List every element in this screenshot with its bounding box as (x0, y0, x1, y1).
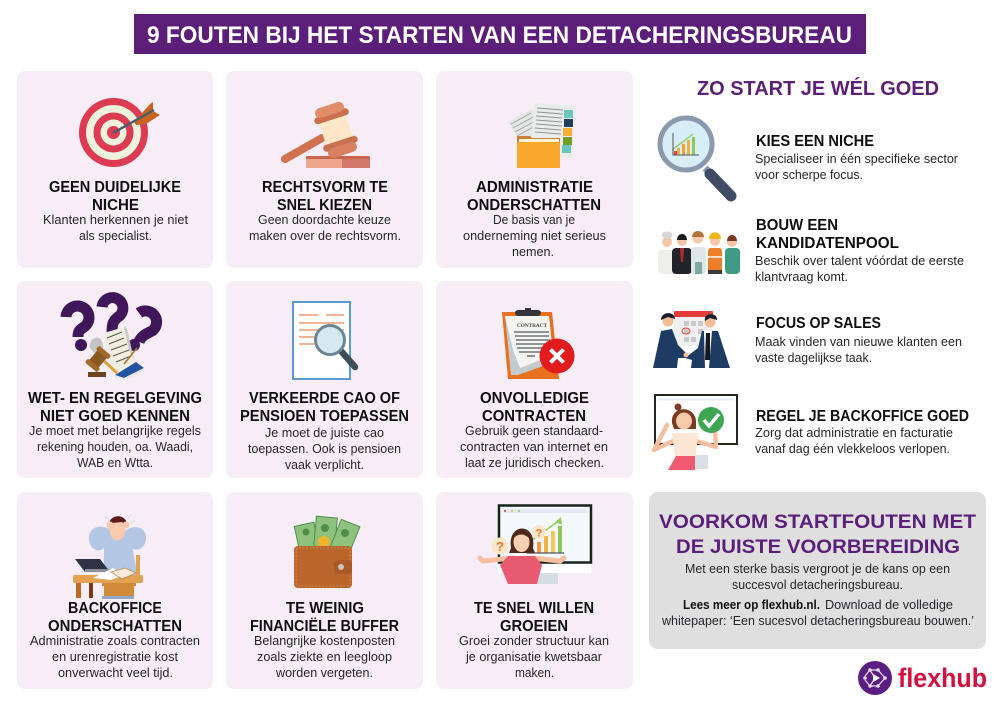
text: FOCUS OP SALES (756, 315, 881, 332)
icon: woman in front of growth chart: ? (496, 539, 504, 554)
tip: regel je backoffice goed (654, 395, 969, 470)
panel: verkeerde cao of pensioen (226, 281, 423, 478)
description: worden vergeten. (275, 666, 373, 680)
description: Gebruik geen standaard- (465, 424, 603, 438)
panel text (685, 562, 950, 592)
panel heading: DE JUISTE VOORBEREIDING (676, 536, 960, 558)
heading (474, 600, 594, 635)
description: laat ze juridisch checken. (465, 456, 604, 470)
heading: NICHE (92, 197, 139, 214)
heading (240, 390, 409, 425)
description (30, 634, 200, 680)
description: toepassen. Ook is pensioen (248, 442, 401, 456)
panel text: Met een sterke basis vergroot je de kans op een (685, 562, 950, 576)
heading: NIET GOED KENNEN (40, 408, 190, 425)
panel: rechtsvorm te snel kiezen (226, 71, 423, 268)
icon: woman in front of growth chart (480, 506, 591, 584)
icon: contract clipboard with red cross (502, 308, 574, 379)
description: rekening houden, oa. Waadi, (37, 440, 193, 454)
panel heading: VOORKOM STARTFOUTEN MET (659, 511, 976, 533)
heading (480, 390, 589, 425)
description (463, 213, 606, 259)
description: als specialist. (79, 229, 152, 243)
text: KANDIDATENPOOL (756, 235, 899, 252)
text: vanaf dag één vlekkeloos verlopen. (755, 442, 950, 456)
description: Groei zonder structuur kan (459, 634, 609, 648)
heading: TE WEINIG (286, 600, 364, 617)
heading: ONVOLLEDIGE (480, 390, 589, 407)
icon: magnifier over chart (660, 118, 731, 196)
heading (262, 179, 388, 214)
panel heading (659, 511, 976, 558)
icon: gavel (285, 100, 370, 168)
icon: wallet with banknotes (294, 516, 360, 588)
heading: FINANCIËLE BUFFER (250, 618, 399, 635)
icon: contract clipboard with red cross: CONTRACT (517, 323, 548, 329)
icon: documents and folder (508, 103, 576, 168)
logo: flexhub: flexhub (898, 663, 987, 693)
panel: administratie onderschatten (436, 71, 633, 268)
description: Administratie zoals contracten (30, 634, 200, 648)
text: BOUW EEN (756, 217, 838, 234)
call to action (661, 598, 974, 628)
heading (250, 600, 399, 635)
logo: flexhub (858, 661, 987, 695)
tip: focus op sales (653, 311, 962, 368)
description (254, 634, 395, 680)
icon: group of professionals (658, 231, 740, 274)
call to action: whitepaper: ‘Een sucesvol detacheringsbureau bouwen.’ (661, 614, 974, 628)
description (29, 424, 201, 470)
description: Klanten herkennen je niet (43, 213, 189, 227)
heading: SNEL KIEZEN (277, 197, 372, 214)
description (249, 213, 401, 243)
description: contracten van internet en (460, 440, 608, 454)
panel: geen duidelijke niche (17, 71, 213, 268)
icon: woman pointing at green check on monitor (654, 395, 737, 470)
heading: TE SNEL WILLEN (474, 600, 594, 617)
tip: bouw een kandidatenpool (658, 217, 964, 284)
icon: woman in front of growth chart: ? (536, 528, 543, 540)
description: maken over de rechtsvorm. (249, 229, 401, 243)
heading (49, 179, 181, 214)
description: maken. (515, 666, 554, 680)
heading: WET- EN REGELGEVING (28, 390, 202, 407)
description: en urenregistratie kost (52, 650, 179, 664)
text: Maak vinden van nieuwe klanten een (755, 335, 962, 349)
description: onverwacht veel tijd. (58, 666, 173, 680)
call to action: Lees meer op flexhub.nl. (683, 598, 820, 612)
description (248, 426, 401, 472)
text: klantvraag komt. (755, 270, 848, 284)
description: nemen. (512, 245, 554, 259)
description (43, 213, 189, 243)
heading: GROEIEN (500, 618, 568, 635)
tip: kies een niche (660, 118, 958, 196)
heading: CONTRACTEN (482, 408, 586, 425)
text: vaste dagelijkse taak. (755, 351, 872, 365)
text (755, 408, 969, 456)
text (755, 315, 962, 365)
panel: wet- en regelgeving (17, 281, 213, 478)
panel: backoffice onderschatten (17, 492, 213, 689)
description: WAB en Wtta. (77, 456, 153, 470)
text: Specialiseer in één specifieke sector (755, 152, 958, 166)
text: REGEL JE BACKOFFICE GOED (756, 408, 969, 425)
description: vaak verplicht. (285, 458, 364, 472)
description: De basis van je (493, 213, 575, 227)
heading: ADMINISTRATIE (476, 179, 593, 196)
heading: ONDERSCHATTEN (48, 618, 182, 635)
icon: handshake in front of calendar (653, 311, 730, 368)
heading: PENSIOEN TOEPASSEN (240, 408, 409, 425)
text (755, 217, 964, 284)
heading: zo start je wel goed: ZO START JE WÉL GOED (697, 77, 939, 100)
icon: target with arrow (79, 98, 160, 167)
heading: GEEN DUIDELIJKE (49, 179, 181, 196)
icon: document with magnifier (293, 302, 355, 379)
description: je organisatie kwetsbaar (465, 650, 602, 664)
panel: te snel willen groeien (436, 492, 633, 689)
description: onderneming niet serieus (463, 229, 606, 243)
description: zoals ziekte en leegloop (257, 650, 392, 664)
text: Zorg dat administratie en facturatie (755, 426, 953, 440)
call to action: Download de volledige (825, 598, 953, 612)
description: Geen doordachte keuze (258, 213, 391, 227)
title banner (134, 14, 866, 54)
panel: onvolledige contracten (436, 281, 633, 478)
heading: RECHTSVORM TE (262, 179, 388, 196)
description: Je moet de juiste cao (265, 426, 384, 440)
text (755, 133, 958, 182)
heading: VERKEERDE CAO OF (249, 390, 400, 407)
text: KIES EEN NICHE (756, 133, 874, 150)
panel: te weinig financiele buffer (226, 492, 423, 689)
panel text: succesvol detacheringsbureau. (732, 578, 903, 592)
heading (467, 179, 601, 214)
title banner: 9 FOUTEN BIJ HET STARTEN VAN EEN DETACHERINGSBUREAU (147, 22, 852, 49)
heading: BACKOFFICE (68, 600, 162, 617)
icon: question marks, law scroll, gavel and book (66, 298, 157, 380)
description: Belangrijke kostenposten (254, 634, 395, 648)
text: voor scherpe focus. (755, 168, 863, 182)
description (460, 424, 608, 470)
description: Je moet met belangrijke regels (29, 424, 201, 438)
description (459, 634, 609, 680)
heading (28, 390, 202, 425)
panel: voorkom startfouten (649, 492, 986, 649)
text: Beschik over talent vóórdat de eerste (755, 254, 964, 268)
icon: stressed person at desk (73, 514, 146, 599)
heading (48, 600, 182, 635)
heading: ONDERSCHATTEN (467, 197, 601, 214)
